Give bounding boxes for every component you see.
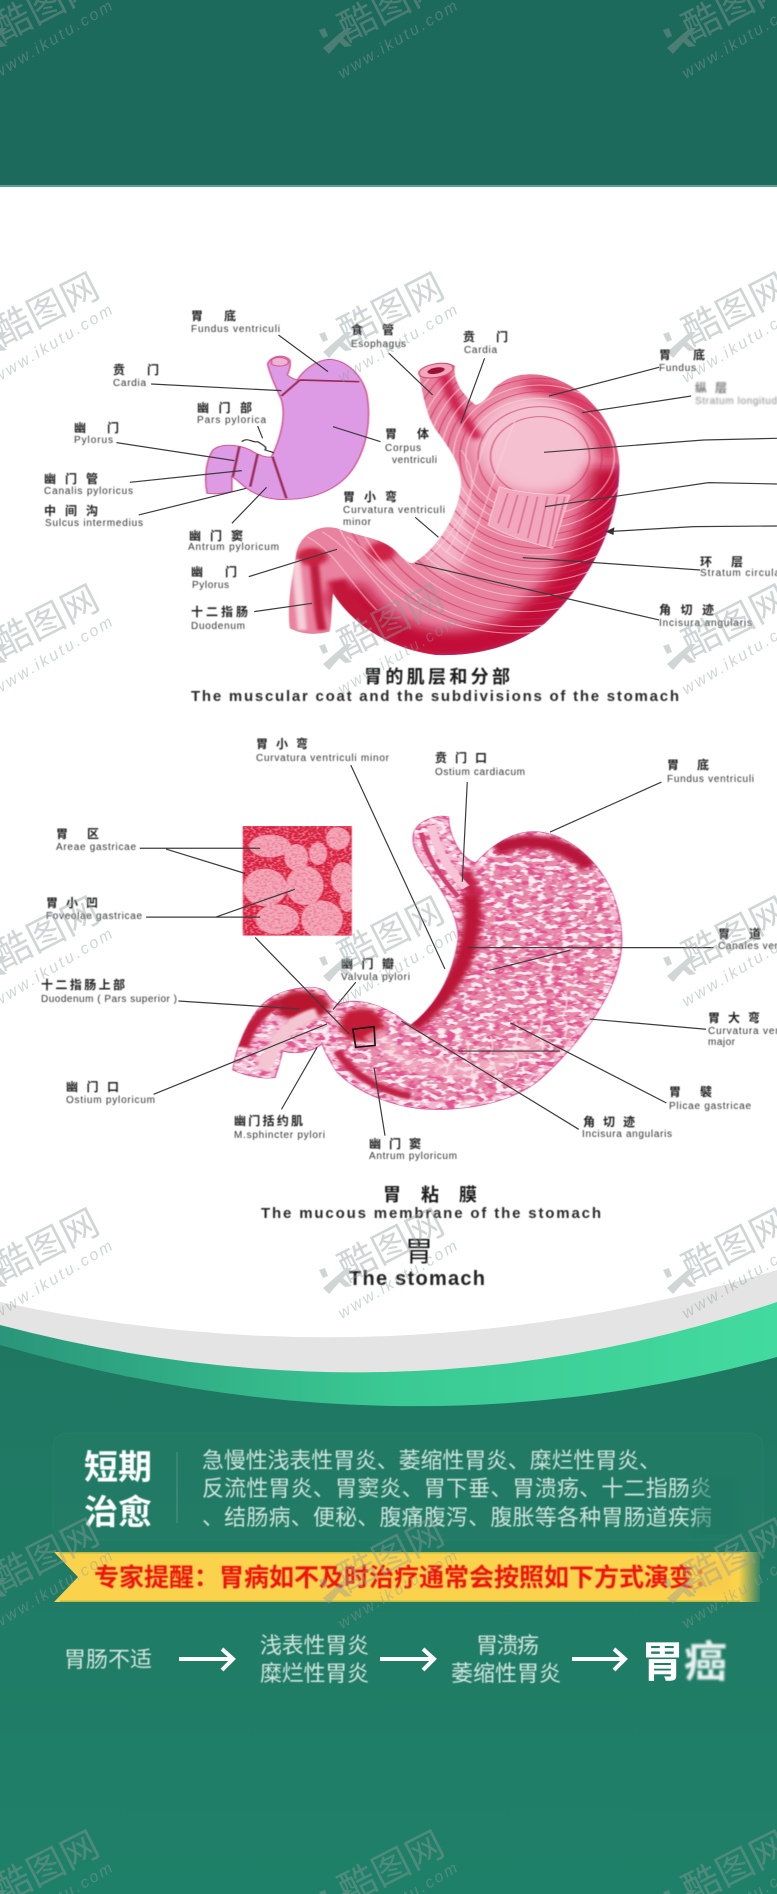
heading: muscular coat: [191, 666, 679, 705]
watermarks: www.ikutu.com: [335, 0, 461, 82]
label: fundus right: Fundus: [659, 363, 696, 374]
label: gastric folds: 胃 襞: [669, 1084, 712, 1099]
text smear at right edge: [690, 1560, 730, 1594]
label: pyloric valve: Valvula pylori: [341, 972, 410, 983]
label: duodenum: [191, 604, 248, 632]
flow step: ulcer and atrophic gastritis: 胃溃疡: [476, 1633, 539, 1658]
flow step: gastritis: 糜烂性胃炎: [260, 1661, 369, 1686]
label: lesser curvature: Curvatura ventriculi: [343, 505, 445, 516]
label: pyloric valve: [341, 956, 410, 983]
label: pyloric canal: 幽门管: [44, 471, 98, 486]
label: duodenum superior: 十二指肠上部: [41, 977, 125, 992]
text block: conditions list: 、结肠病、便秘、腹痛腹泻、腹胀等各种胃肠道疾病: [202, 1505, 712, 1530]
panel: short-term treatment: [53, 1433, 763, 1540]
watermarks: 酷图网: [332, 1202, 450, 1289]
leader lines: [116, 335, 777, 620]
label: pyloric canal: [44, 471, 133, 497]
label: lesser curvature: [256, 736, 390, 764]
inset: gastric areas magnified: [243, 826, 355, 938]
label: cardia: 贲 门: [113, 362, 159, 377]
banner: expert reminder: 专家提醒：胃病如不及时治疗通常会按照如下方式演变：: [94, 1563, 719, 1592]
labels: mucosa stomach: [41, 736, 777, 1290]
flow step: gastritis: 浅表性胃炎: [260, 1633, 369, 1658]
label: pylorus: 幽 门: [74, 420, 119, 435]
illustration: mucosa stomach: [228, 814, 624, 1115]
heading: mucous membrane: The mucous membrane of the stomach: [261, 1205, 601, 1222]
label: longitudinal layer: 纵 层: [695, 380, 727, 395]
label: esophagus: Esophagus: [351, 339, 406, 350]
label: cardia: Cardia: [113, 378, 146, 389]
heading: short-term cure: 治愈: [84, 1494, 152, 1532]
heading: muscular coat: 胃的肌层和分部: [364, 666, 510, 687]
label: duodenum superior: Duodenum ( Pars superior ): [41, 994, 177, 1005]
heading: the stomach: The stomach: [349, 1268, 485, 1290]
label: cardia right: 贲 门: [463, 329, 508, 344]
label: pyloric valve: 幽门瓣: [341, 956, 394, 971]
label: angular incisure: Incisura angularis: [582, 1129, 672, 1140]
label: fundus: [191, 308, 280, 335]
label: gastric areas: [56, 827, 136, 853]
label: pyloric orifice: [66, 1079, 155, 1106]
labels: purple stomach and muscular stomach: [44, 308, 777, 705]
curved footer background: [0, 1270, 777, 1894]
watermarks: www.ikutu.com: [335, 1238, 461, 1322]
label: fundus: Fundus ventriculi: [667, 774, 754, 785]
label: fundus: 胃 底: [191, 308, 236, 323]
label: gastric areas: 胃 区: [56, 827, 99, 841]
flow step: ulcer and atrophic gastritis: 萎缩性胃炎: [451, 1661, 561, 1686]
watermarks: 酷图网: [332, 890, 450, 977]
watermarks: www.ikutu.com: [335, 926, 461, 1010]
label: angular incisure: Incisura angularis: [659, 618, 752, 629]
label: gastric canals: 胃 道: [718, 926, 761, 941]
watermarks: www.ikutu.com: [335, 1548, 461, 1632]
arrow 2: [380, 1649, 434, 1670]
label: lesser curvature: 胃小弯: [256, 736, 308, 751]
flow step: stomach cancer: [641, 1639, 727, 1687]
label: circular layer: 环 层: [700, 555, 743, 569]
label: greater curvature: 胃大弯: [708, 1010, 760, 1025]
label: pyloric sphincter: [234, 1113, 325, 1141]
label: pyloric antrum: 幽门窦: [189, 528, 243, 543]
label: angular incisure: [582, 1114, 672, 1140]
label: gastric pits: Foveolae gastricae: [46, 911, 142, 922]
illustration: muscular stomach: [288, 362, 620, 656]
flow step: ulcer and atrophic gastritis: [451, 1633, 561, 1686]
banner: expert reminder: [54, 1552, 760, 1602]
flow step: stomach cancer: 癌: [684, 1639, 727, 1687]
label: intermediate sulcus: Sulcus intermedius: [45, 518, 143, 529]
text block: conditions list: [202, 1448, 712, 1530]
heading: mucous membrane: 胃 粘 膜: [383, 1185, 477, 1205]
label: corpus: 胃 体: [385, 426, 429, 441]
label: cardia right: [463, 329, 508, 356]
watermarks: www.ikutu.com: [335, 614, 461, 698]
label: gastric folds: Plicae gastricae: [669, 1101, 751, 1112]
label: fundus: [667, 757, 754, 785]
label: duodenum: Duodenum: [191, 621, 245, 632]
label: pyloric sphincter: M.sphincter pylori: [234, 1130, 325, 1141]
label: gastric canals: [718, 926, 777, 952]
label: pylorus: Pylorus: [74, 435, 113, 446]
flow step: stomach cancer: 胃: [641, 1639, 684, 1687]
arrow 1: [179, 1649, 233, 1670]
watermarks: 酷图网: [332, 266, 450, 353]
stomach diagram: mucous membrane: [140, 765, 714, 1136]
label: cardia: [113, 362, 159, 389]
label: lesser curvature: 胃小弯: [343, 489, 397, 504]
heading: mucous membrane: [261, 1185, 601, 1222]
white content panel: [0, 185, 777, 1386]
label: pylorus lower: 幽 门: [191, 564, 237, 579]
heading: short-term cure: [84, 1449, 152, 1532]
label: cardiac orifice: [435, 750, 525, 778]
heading: the stomach: 胃: [405, 1236, 433, 1267]
label: angular incisure: [659, 602, 752, 629]
label: greater curvature: major: [708, 1037, 736, 1048]
label: duodenum superior: [41, 977, 177, 1005]
label: pyloric antrum: [188, 528, 279, 553]
label: gastric pits: [46, 896, 142, 922]
label: pyloric orifice: Ostium pyloricum: [66, 1095, 155, 1106]
label: gastric folds: [669, 1084, 751, 1112]
label: duodenum: 十二指肠: [191, 604, 248, 619]
text block: conditions list: 急慢性浅表性胃炎、萎缩性胃炎、糜烂性胃炎、: [202, 1448, 661, 1473]
watermarks: 酷图网: [332, 578, 450, 665]
heading: short-term cure: 短期: [84, 1449, 152, 1487]
label: pyloric canal: Canalis pyloricus: [44, 486, 133, 497]
watermarks: 酷图网: [332, 1512, 450, 1599]
label: fundus right: [659, 347, 705, 374]
label: fundus right: 胃 底: [659, 347, 705, 362]
label: cardiac orifice: Ostium cardiacum: [435, 767, 525, 778]
label: pyloric antrum: 幽门窦: [369, 1136, 421, 1151]
watermarks: www.ikutu.com: [335, 302, 461, 386]
arrow 3: [572, 1649, 625, 1670]
label: lesser curvature: [343, 489, 445, 528]
illustration: purple stomach subdivisions: [206, 356, 369, 500]
flow step: stomach discomfort: 胃肠不适: [64, 1647, 152, 1672]
text fade at right edge: [696, 1478, 736, 1534]
label: pylorus lower: Pylorus: [192, 580, 229, 591]
label: pyloric antrum: Antrum pyloricum: [188, 542, 279, 553]
label: lesser curvature: Curvatura ventriculi minor: [256, 753, 390, 764]
label: greater curvature: [708, 1010, 777, 1048]
flow step: gastritis: [260, 1633, 369, 1686]
label: pars pylorica: [197, 400, 266, 426]
text block: conditions list: 反流性胃炎、胃窦炎、胃下垂、胃溃疡、十二指肠炎: [202, 1476, 712, 1501]
label: intermediate sulcus: [44, 503, 143, 529]
label: corpus: ventriculi: [392, 455, 437, 466]
label: pyloric antrum: Antrum pyloricum: [369, 1151, 457, 1162]
label: circular layer: [700, 555, 777, 579]
label: angular incisure: 角切迹: [659, 602, 714, 617]
label: fundus: 胃 底: [667, 757, 709, 772]
label: intermediate sulcus: 中间沟: [44, 503, 98, 518]
label: angular incisure: 角切迹: [583, 1114, 635, 1129]
page background: top green header: [0, 0, 777, 186]
label: lesser curvature: minor: [343, 517, 372, 528]
label: esophagus: 食 管: [351, 322, 394, 337]
label: corpus: [385, 426, 437, 466]
label: pylorus lower: [191, 564, 237, 591]
label: longitudinal layer: [695, 380, 777, 407]
label: pyloric sphincter: 幽门括约肌: [234, 1113, 303, 1128]
flow: disease progression: [64, 1633, 727, 1687]
heading: the stomach: [349, 1236, 485, 1290]
stomach diagram: muscular coat and subdivisions: [116, 334, 777, 656]
label: longitudinal layer: Stratum longitud: [695, 396, 777, 407]
label: gastric pits: 胃小凹: [46, 896, 98, 910]
label: cardiac orifice: 贲门口: [435, 750, 487, 765]
label: pars pylorica: Pars pylorica: [197, 415, 266, 426]
label: fundus: Fundus ventriculi: [191, 324, 280, 335]
label: pyloric orifice: 幽门口: [66, 1079, 119, 1094]
label: esophagus: [351, 322, 406, 350]
heading: muscular coat: The muscular coat and the subdivisions of the stomach: [191, 688, 679, 705]
label: pyloric antrum: [369, 1136, 457, 1162]
label: gastric areas: Areae gastricae: [56, 842, 136, 853]
label: corpus: Corpus: [385, 443, 421, 454]
leader lines: mucosa: [140, 765, 714, 1136]
label: pars pylorica: 幽门部: [197, 400, 252, 415]
label: pylorus: [74, 420, 119, 446]
label: cardia right: Cardia: [464, 345, 497, 356]
